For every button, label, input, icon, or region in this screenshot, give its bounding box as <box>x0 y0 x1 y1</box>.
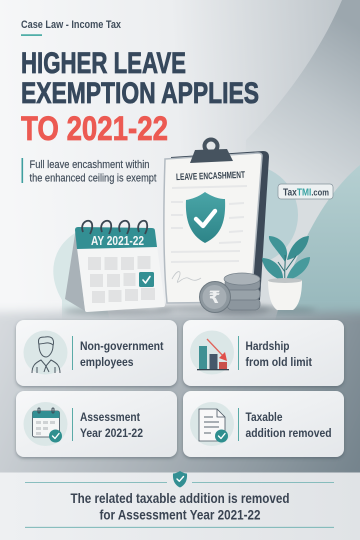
panel: non-government employees: employees <box>80 355 134 369</box>
callout: exemption summary: Full leave encashment within <box>30 159 150 171</box>
icon: clipboard with shield <box>155 140 275 312</box>
icon: desk calendar: AY 2021-22 <box>91 234 144 248</box>
title: EXEMPTION APPLIES <box>21 77 259 110</box>
icon: desk calendar <box>63 221 173 314</box>
icon: coin stack and rupee coin <box>200 273 268 315</box>
icon: small shield <box>173 471 187 488</box>
icon: small calendar <box>32 408 62 442</box>
badge: TaxTMI.com: TaxTMI.com <box>283 188 329 198</box>
icon: employee <box>32 337 60 373</box>
panel: taxable addition removed: Taxable <box>246 410 283 424</box>
title: HIGHER LEAVE <box>21 47 186 80</box>
callout: exemption summary: the enhanced ceiling is exempt <box>30 172 156 184</box>
panel: hardship from old limit: from old limit <box>246 355 312 369</box>
panel: hardship from old limit <box>183 320 344 386</box>
title <box>21 47 259 148</box>
panel: conclusion band <box>0 471 360 540</box>
panel: hardship from old limit: Hardship <box>246 339 290 353</box>
panel: assessment year: Assessment <box>80 410 140 424</box>
eyebrow: category <box>21 19 122 36</box>
icon: potted plant <box>260 236 316 313</box>
icon: coin stack and rupee coin: ₹ <box>209 288 220 308</box>
panel: non-government employees: Non-government <box>80 339 164 353</box>
icon: document with check <box>199 409 228 442</box>
panel: assessment year: Year 2021-22 <box>80 426 143 440</box>
badge: TaxTMI.com <box>278 184 333 199</box>
eyebrow: category: Case Law - Income Tax <box>21 19 122 31</box>
conclusion text: The related taxable addition is removed <box>70 491 290 506</box>
title: TO 2021-22 <box>21 110 168 148</box>
clip <box>190 140 233 163</box>
conclusion text: for Assessment Year 2021-22 <box>100 508 260 522</box>
clipboard heading: LEAVE ENCASHMENT <box>176 170 245 183</box>
panel: assessment year <box>16 391 177 457</box>
panel: non-government employees <box>16 320 177 386</box>
icon: falling bars <box>197 339 229 370</box>
panel: taxable addition removed: addition removed <box>246 426 332 440</box>
panel: taxable addition removed <box>183 391 344 457</box>
callout: exemption summary <box>22 158 156 184</box>
shield <box>186 192 225 243</box>
